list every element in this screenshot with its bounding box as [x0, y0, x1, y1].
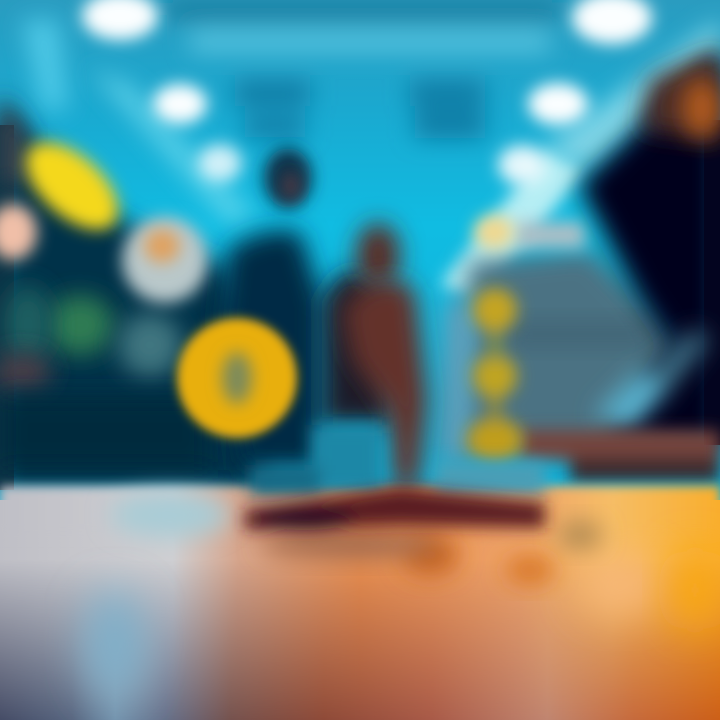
- ceiling: round lights: [82, 0, 652, 185]
- right side: brown ledge: [520, 430, 720, 482]
- floor: [0, 486, 720, 720]
- figure: brown person: [322, 223, 428, 488]
- platform: dark maroon: [245, 488, 545, 530]
- coin: white and orange: [122, 217, 208, 303]
- coins: stacked column: [467, 215, 523, 462]
- left side: dark wall with green glow: [0, 95, 270, 490]
- coin: large yellow: [177, 318, 297, 438]
- figure: dark teal person: [220, 148, 322, 470]
- ceiling: light beams: [22, 20, 720, 300]
- right side: dark roof with orange glow: [580, 50, 720, 450]
- right side: blue diagonal stripe: [595, 328, 710, 430]
- background: cyan ceiling: [0, 0, 720, 500]
- coin: pale, far left: [0, 204, 37, 260]
- pedestal: teal bases: [250, 425, 545, 495]
- ceiling: dark panel bands: [165, 0, 560, 138]
- coin: yellow tilted, upper left: [10, 126, 134, 246]
- right side: gray stepped structure: [440, 222, 690, 460]
